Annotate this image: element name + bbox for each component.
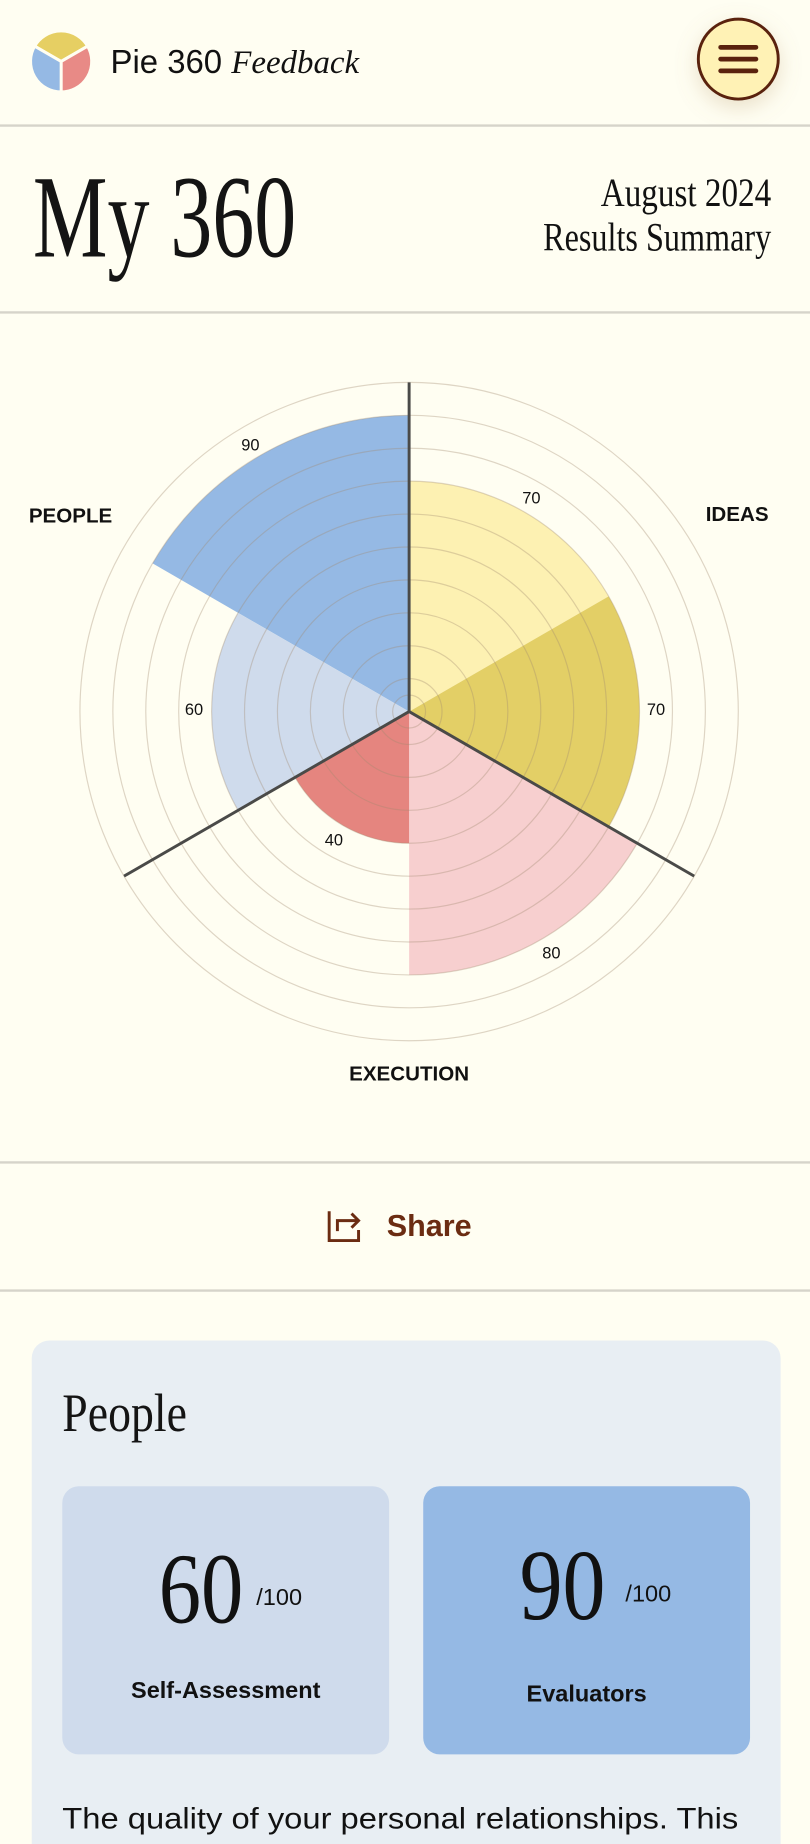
panel: people (32, 1341, 781, 1844)
subtitle: date and summary (543, 170, 771, 260)
title: My 360: My 360 (33, 153, 296, 283)
heading: People: People (62, 1383, 187, 1443)
share button (329, 1209, 472, 1243)
share button: Share (387, 1209, 472, 1243)
score card: self-assessment (62, 1486, 389, 1754)
score card: evaluators (423, 1486, 750, 1754)
score card: self-assessment: Self-Assessment (131, 1677, 321, 1703)
category labels: IDEAS (706, 503, 769, 526)
score card: self-assessment: 60 (159, 1533, 243, 1645)
category labels (29, 503, 769, 1086)
polar chart (29, 382, 769, 1086)
icon: logo pie (31, 31, 92, 92)
value labels: 90 (241, 437, 260, 455)
value labels: 40 (325, 832, 343, 850)
value labels (185, 437, 665, 962)
value labels: 70 (522, 489, 541, 507)
description text: The quality of your personal relationships. This (62, 1802, 738, 1835)
sector: execution evaluators 40 (295, 712, 409, 843)
sector: execution self 80 (409, 712, 637, 975)
score card: evaluators: /100 (625, 1581, 671, 1607)
category labels: EXECUTION (349, 1063, 469, 1086)
score card: evaluators: 90 (520, 1529, 605, 1641)
brand name: Pie 360 Feedback (111, 43, 361, 81)
sector: people evaluators 90 (153, 415, 409, 712)
menu button (698, 19, 778, 99)
score card: self-assessment: /100 (256, 1584, 302, 1610)
icon: share (329, 1211, 359, 1241)
sector: ideas self 70 (409, 481, 609, 712)
score card: evaluators: Evaluators (527, 1680, 647, 1706)
sector: ideas evaluators 70 (409, 596, 639, 827)
value labels: 60 (185, 701, 203, 719)
sector: people self 60 (212, 613, 409, 810)
category labels: PEOPLE (29, 504, 112, 527)
value labels: 80 (542, 944, 561, 962)
header (31, 19, 778, 99)
value labels: 70 (647, 701, 665, 719)
subtitle: date and summary: August 2024 (601, 170, 771, 215)
axis lines (124, 382, 694, 876)
